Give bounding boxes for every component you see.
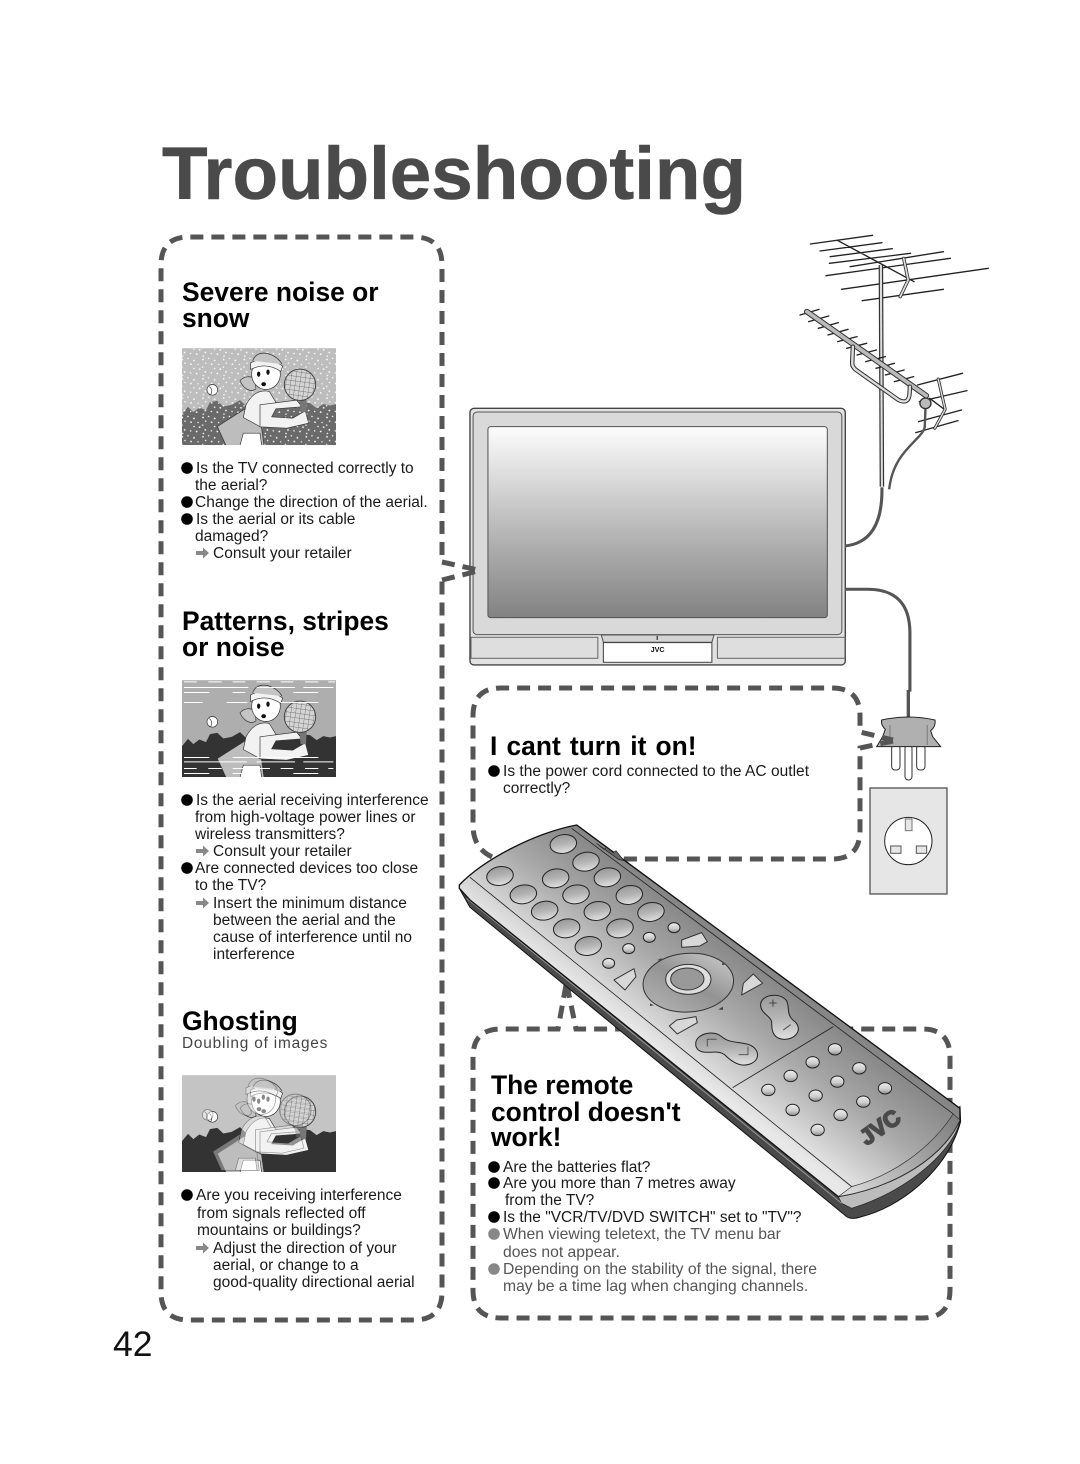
- heading: remote control: The remote: [491, 1070, 633, 1100]
- text: remote checks: When viewing teletext, the TV menu bar: [503, 1226, 781, 1243]
- text: pattern checks: Insert the minimum distance: [213, 895, 407, 912]
- dashed panel: symptoms of picture problems: [161, 237, 478, 1320]
- illustration: striped picture: [182, 680, 336, 777]
- text: pattern checks: cause of interference until no: [213, 929, 412, 946]
- text: pattern checks: to the TV?: [195, 877, 267, 894]
- JVC logo: JVC: [854, 1104, 905, 1150]
- text: severe noise checks: Is the TV connected correctly to: [196, 460, 414, 477]
- text: severe noise checks: Consult your retailer: [213, 545, 352, 562]
- page number: 42: [113, 1324, 152, 1364]
- text: pattern checks: Is the aerial receiving interference: [196, 792, 429, 809]
- heading: cant turn on: I cant turn it on!: [490, 731, 697, 761]
- text: severe noise checks: [181, 460, 428, 562]
- heading: severe noise: Severe noise or: [182, 277, 379, 307]
- text: ghosting checks: Adjust the direction of your: [213, 1240, 397, 1257]
- text: ghosting checks: from signals reflected off: [197, 1205, 366, 1222]
- plug: [877, 690, 941, 780]
- volume rocker: [761, 995, 798, 1039]
- text: power checks: Is the power cord connected to the AC outlet: [503, 763, 810, 780]
- text: ghosting checks: good-quality directional aerial: [213, 1274, 415, 1291]
- dashed panel: I cant turn it on: [473, 688, 893, 859]
- text: pattern checks: between the aerial and the: [213, 912, 396, 929]
- text: remote checks: Are the batteries flat?: [503, 1159, 651, 1176]
- subheading: doubling of images: Doubling of images: [182, 1035, 328, 1052]
- heading: patterns: or noise: [182, 632, 285, 662]
- heading: patterns: Patterns, stripes: [182, 606, 389, 636]
- text: severe noise checks: damaged?: [195, 528, 269, 545]
- text: pattern checks: Are connected devices too close: [195, 860, 418, 877]
- wall socket: [870, 788, 947, 894]
- text: remote checks: from the TV?: [505, 1192, 595, 1209]
- title: Troubleshooting: [162, 132, 746, 215]
- text: ghosting checks: Are you receiving interference: [196, 1187, 402, 1204]
- text: pattern checks: from high-voltage power lines or: [195, 809, 416, 826]
- direction pad: [641, 950, 736, 1015]
- text: severe noise checks: the aerial?: [195, 477, 268, 494]
- text: remote checks: Is the "VCR/TV/DVD SWITCH" set to "TV"?: [503, 1209, 802, 1226]
- text: ghosting checks: mountains or buildings?: [197, 1222, 361, 1239]
- text: pattern checks: [181, 792, 429, 963]
- heading: remote control: control doesn't: [491, 1097, 681, 1127]
- text: remote checks: Depending on the stability of the signal, there: [503, 1261, 817, 1278]
- text: severe noise checks: Is the aerial or its cable: [196, 511, 355, 528]
- large buttons: [485, 832, 666, 957]
- plug and wall socket: [870, 690, 947, 894]
- text: severe noise checks: Change the direction of the aerial.: [195, 494, 428, 511]
- remote control: [459, 825, 961, 1218]
- text: remote checks: may be a time lag when changing channels.: [503, 1278, 808, 1295]
- text: ghosting checks: [181, 1187, 415, 1291]
- heading: remote control: work!: [490, 1122, 561, 1152]
- text: pattern checks: Consult your retailer: [213, 843, 352, 860]
- text: power checks: [488, 763, 810, 797]
- small round buttons: [603, 923, 892, 1136]
- text: power checks: correctly?: [503, 780, 571, 797]
- illustration: ghosted picture: [182, 1075, 336, 1172]
- text: pattern checks: interference: [213, 946, 295, 963]
- dashed panel: remote control: [473, 985, 950, 1318]
- illustration: snowy picture: [182, 348, 336, 445]
- aerial with cables: [800, 235, 988, 692]
- heading: ghosting: Ghosting: [182, 1006, 298, 1036]
- text: remote checks: Are you more than 7 metres away: [503, 1175, 736, 1192]
- text: remote checks: [488, 1159, 817, 1295]
- TV set: JVC: [651, 646, 665, 654]
- remote body: [459, 825, 961, 1218]
- arrow shaped buttons: [614, 933, 763, 1034]
- heading: severe noise: snow: [182, 303, 250, 333]
- channel rocker: [696, 1033, 758, 1065]
- text: pattern checks: wireless transmitters?: [194, 826, 345, 843]
- text: ghosting checks: aerial, or change to a: [213, 1257, 359, 1274]
- TV set: [470, 408, 845, 665]
- text: remote checks: does not appear.: [503, 1244, 620, 1261]
